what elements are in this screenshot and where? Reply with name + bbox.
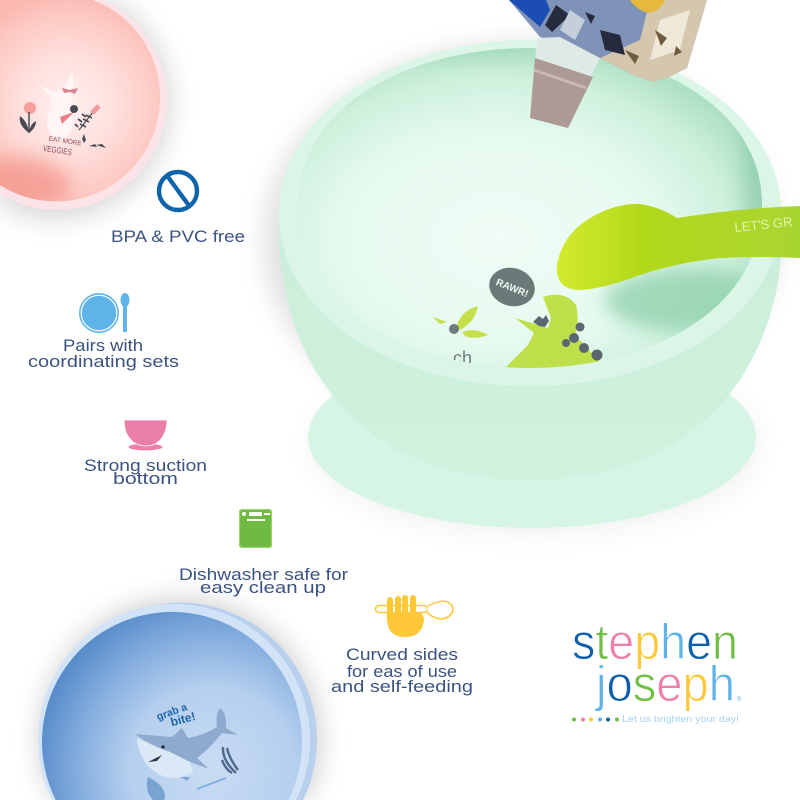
panel: pink bowl: [0, 0, 169, 217]
icon: dinosaur: [505, 295, 602, 368]
icon: flower: [20, 102, 36, 133]
text: dishwasher safe: easy clean up: [200, 578, 326, 597]
decoration line: [197, 778, 226, 789]
text: eat more veggies: EAT MORE: [48, 135, 83, 148]
text: curved sides: and self-feeding: [331, 677, 473, 696]
suction base: [308, 346, 756, 528]
text: dishwasher safe: Dishwasher safe for: [179, 565, 348, 584]
logo: stephen joseph: stephen: [572, 614, 738, 670]
icon: shell: [147, 777, 165, 800]
text: curved sides: for eas of use: [347, 662, 457, 681]
text: strong suction bottom: Strong suction: [84, 456, 207, 475]
callout: rawr speech bubble: RAWR!: [494, 277, 530, 300]
text: pairs with coordinating sets: coordinating sets: [28, 352, 179, 371]
text: strong suction bottom: bottom: [113, 469, 178, 488]
logo: stephen joseph: [572, 614, 742, 725]
icon: pink bowl: [124, 420, 167, 450]
icon: sprig: [75, 106, 106, 148]
text: eat more veggies: VEGGIES: [42, 143, 73, 157]
text: eat more veggies: [42, 135, 83, 157]
logo: stephen joseph: joseph: [594, 656, 735, 712]
icon: dishwasher: [239, 509, 272, 548]
callout: rawr speech bubble: [485, 263, 539, 311]
panel: mint bowl: [265, 0, 800, 535]
bowl body: [279, 40, 782, 480]
icon: plate and spoon: [79, 293, 130, 333]
panel: blue bowl: [38, 600, 319, 800]
spoon: LET'S GR: [734, 214, 793, 235]
logo: stephen joseph: ®: [737, 696, 742, 703]
spoon: [557, 204, 800, 290]
icon: no symbol: [159, 172, 197, 210]
text: grab a bite: [155, 701, 197, 729]
icon: hand holding spoon: [376, 595, 453, 637]
text: pairs with coordinating sets: Pairs with: [63, 336, 143, 355]
icon: seaweed: [222, 747, 238, 773]
puree pouch: [509, 0, 707, 128]
logo: stephen joseph: Let us brighten your day!: [622, 714, 739, 725]
text: grab a bite: bite!: [169, 709, 197, 729]
icon: bunny illustration: [38, 72, 78, 139]
bowl interior: [298, 48, 762, 368]
icon: leaf sprig: ch: [453, 348, 472, 368]
text: pairs with coordinating sets: [28, 336, 179, 371]
text: curved sides: Curved sides: [346, 645, 458, 664]
text: grab a bite: grab a: [155, 701, 189, 723]
text: strong suction bottom: [84, 456, 207, 488]
text: BPA & PVC free: BPA & PVC free: [111, 227, 245, 246]
text: dishwasher safe: [179, 565, 348, 597]
icon: shark: [135, 708, 238, 781]
icon: leaf sprig: [433, 306, 488, 368]
text: curved sides: [331, 645, 473, 696]
